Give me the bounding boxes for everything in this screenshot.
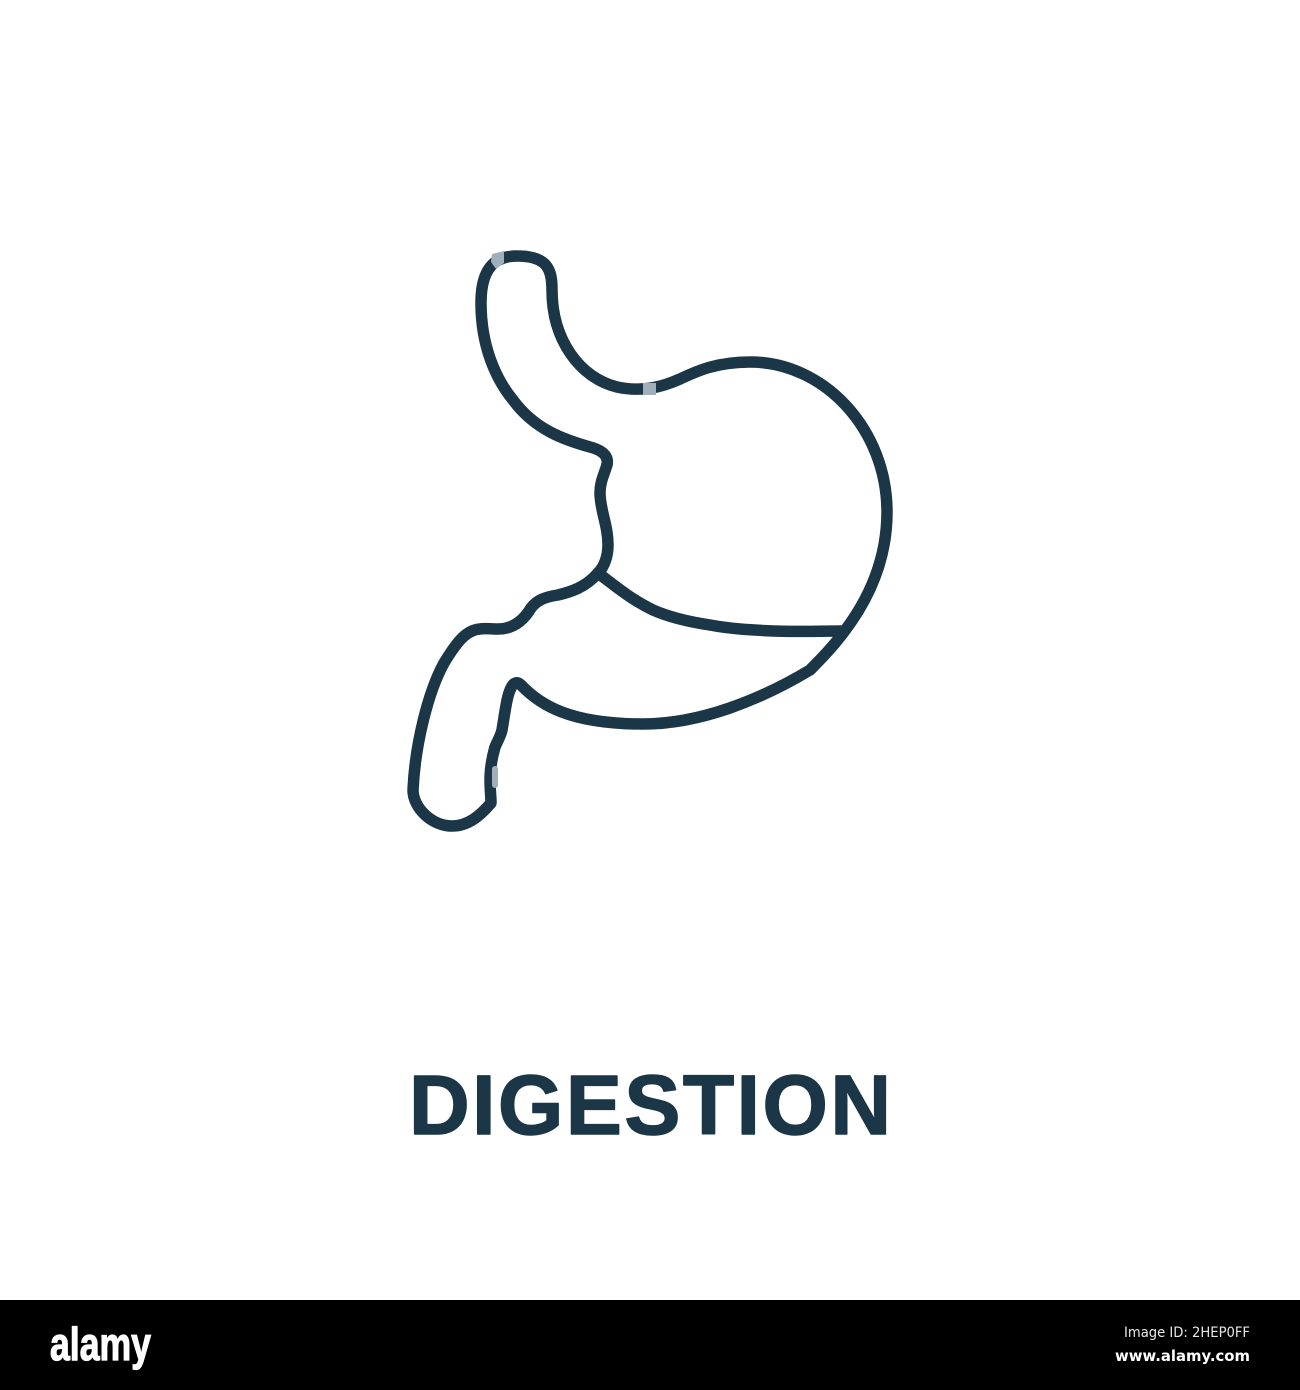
icon: stomach outline: [413, 256, 887, 826]
icon: stomach inner fold line: [598, 573, 843, 631]
title: DIGESTION: DIGESTION: [409, 1058, 891, 1152]
footer website: www.alamy.com: [1115, 1347, 1250, 1365]
footer logo: alamy: alamy: [50, 1318, 151, 1370]
footer bar: [0, 1300, 1300, 1390]
footer image id: Image ID: 2HEP0FF: [1124, 1325, 1250, 1341]
watermark glints on the icon: [491, 251, 656, 788]
